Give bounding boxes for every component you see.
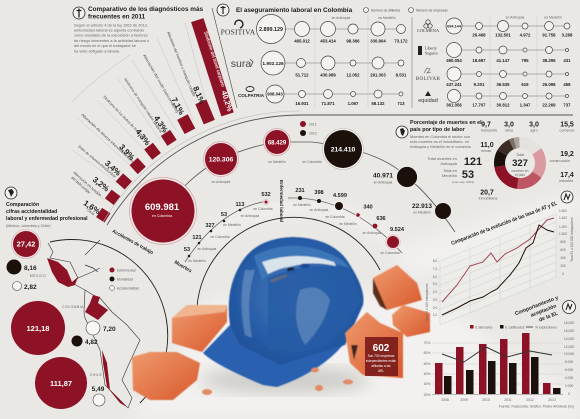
heading: comportamiento: aceptación — [530, 303, 557, 319]
bubble: 120.306 en Antioquia: en Antioquia — [212, 180, 230, 184]
heading: comparación cifras — [5, 187, 88, 228]
insurer row: Colpatria: 1.067 — [348, 101, 359, 106]
icon: trend N — [561, 191, 573, 203]
insurer row: Bolívar: 36.535 — [496, 82, 510, 87]
insurer row: Bolívar: 458 — [563, 82, 571, 87]
insurer row: Colpatria: COLPATRIA — [238, 93, 265, 98]
text block: definición enfermedad laboral: Según el artículo 4 de la ley 1562 de 2012, — [74, 22, 148, 28]
México values — [6, 230, 40, 291]
bubble: 120.306 en Antioquia: 120.306 — [209, 156, 233, 164]
heading: comparación cifras: (México, colombia y Chile) — [6, 224, 51, 228]
line chart: evolución AT y EL: 2,0 — [433, 306, 437, 310]
insurer row: Bolívar — [416, 67, 571, 87]
chart: mortalidad line: 53 — [184, 247, 190, 253]
stats: totals: Total en — [443, 168, 457, 173]
donut labels — [479, 122, 574, 200]
México values: 8,16 — [24, 265, 37, 272]
bubble: 214.410 en Colombia: 214.410 — [331, 146, 355, 154]
insurer row: Equidad: 30.812 — [496, 102, 510, 108]
chart: enfermedad laboral line — [278, 180, 405, 255]
legend: 2012 / 2013: 2013 — [309, 132, 317, 136]
bar chart: comportamiento y aceptación: 70% — [424, 341, 430, 345]
callout: 602: 602 — [373, 343, 390, 354]
bar chart: comportamiento y aceptación: 4.000 — [565, 376, 573, 380]
text block: muertes: más muertes es el inmobiliario. en — [410, 139, 469, 144]
insurer row: Liberty Seguros: 431 — [563, 58, 571, 63]
text block: definición enfermedad laboral: enfermedad laboral es aquella contraída — [74, 28, 144, 32]
heading: diagnósticos — [73, 6, 204, 20]
insurer row: Positiva: 2.899.129 — [259, 27, 283, 33]
insurer row: Liberty Seguros: 18.697 — [472, 58, 486, 63]
stats: totals: Medellín — [442, 173, 457, 178]
bubble: 214.410 en Colombia — [302, 128, 364, 170]
insurer row: Sura: 1.902.126 — [262, 61, 284, 67]
insurer row: Bolívar: 619 — [521, 82, 529, 87]
chart: radial bar chart of diagnoses: Alteración del hombro y manguito rotador — [166, 31, 196, 98]
legend: afiliados y empresas — [364, 8, 448, 12]
insurer row: Sura: 430.089 — [320, 72, 336, 78]
Chile values: 5,49 — [92, 386, 105, 393]
insurer row: Equidad: 361.056 — [446, 102, 462, 108]
line chart: evolución AT y EL: 800 — [560, 240, 566, 244]
chart: enfermedad laboral line: 636 — [376, 216, 386, 222]
insurer row: Liberty Seguros: 41.147 — [496, 58, 510, 63]
chart: mortalidad line: en Antioquia — [241, 214, 259, 218]
bar chart: comportamiento y aceptación — [424, 321, 574, 402]
chart: mortalidad line: 53 — [221, 212, 227, 218]
line chart: evolución AT y EL: Tasa EL x 100.000 trabajadores — [570, 217, 574, 262]
text block: definición enfermedad laboral: de riesgo inherentes a la actividad laboral o — [74, 38, 149, 43]
chart: mortalidad line: 327 — [205, 223, 215, 229]
chart: radial bar chart of diagnoses: 4,3% — [134, 127, 152, 147]
line chart: evolución AT y EL: 1,0 — [433, 313, 437, 317]
donut labels: 15,5 — [560, 122, 574, 128]
stats: totals: Total muertes en — [427, 156, 457, 161]
line chart: evolución AT y EL: 1.000 — [559, 232, 567, 236]
insurer row: Equidad: 1.347 — [520, 102, 531, 108]
heading: diagnósticos: Comparativo de los diagnósticos más — [88, 6, 204, 13]
chart: mortalidad line: 532 — [261, 192, 271, 198]
chart: enfermedad laboral line: 4.599 — [333, 193, 347, 199]
chart: radial bar chart of diagnoses: 1,6% — [82, 199, 102, 216]
insurer row: Bolívar: 9.201 — [474, 82, 485, 87]
México values: 2,82 — [24, 284, 37, 291]
column headers: en Antioquia — [332, 16, 350, 20]
chart: radial bar chart of diagnoses: del dedo pulgar — [70, 176, 92, 195]
bar chart: comportamiento y aceptación: 40% — [424, 372, 430, 376]
bar chart: comportamiento y aceptación: 18.000 — [564, 321, 574, 325]
icon: bricks — [132, 265, 430, 400]
chart: enfermedad laboral line: 231 — [295, 188, 305, 194]
chart: radial bar chart of diagnoses — [70, 18, 235, 222]
line chart: evolución AT y EL: 5,0 — [433, 282, 437, 286]
chart: radial bar chart of diagnoses: 8,1% — [191, 85, 206, 105]
legend: bar chart: IL laborales — [475, 326, 493, 330]
bar chart: comportamiento y aceptación: 2010 — [482, 398, 490, 402]
bar chart: comportamiento y aceptación: 12.000 — [564, 345, 574, 349]
donut labels: 20,7 — [480, 190, 494, 196]
donut labels: inmobiliaria — [479, 196, 498, 200]
Chile values: 111,87 — [50, 379, 72, 388]
illustration: helmet and bricks — [132, 237, 430, 400]
bar chart: comportamiento y aceptación: 2011 — [504, 398, 512, 402]
chart: radial bar chart of diagnoses: 40,2% — [219, 89, 235, 113]
insurer row: Positiva: 98.366 — [346, 38, 360, 44]
map legend: Mortalidad — [117, 278, 133, 282]
chart: radial bar chart of diagnoses: Dolor de columna dorsolumbar — [77, 145, 117, 179]
donut labels: 11,0 — [480, 142, 494, 149]
text block: definición enfermedad laboral: como resultado de la exposición a factores — [74, 32, 148, 38]
line chart: evolución AT y EL: 1.600 — [559, 209, 567, 213]
heading: comparación cifras: laboral y enfermedad profesional — [6, 216, 88, 222]
source line: Fuente: Fasecolda. Gráfico: Pedro Arboleda (hc) — [499, 404, 574, 408]
insurer row: Positiva: 330.904 — [370, 38, 386, 44]
line chart: evolución AT y EL: 8,0 — [433, 259, 437, 263]
chart: radial bar chart of diagnoses: Alteración en tendón — [72, 171, 102, 197]
line chart: evolución AT y EL: 3,0 — [433, 298, 437, 302]
insurer row: Colpatria: 71.871 — [321, 101, 335, 106]
legend: bar chart — [470, 325, 557, 330]
chart: radial bar chart of diagnoses: 4,3% — [152, 114, 169, 134]
stats: totals — [427, 156, 482, 184]
insurer row: Equidad: equidad — [418, 98, 438, 104]
insurer row: Colpatria: 713 — [397, 101, 405, 106]
text block: definición enfermedad laboral — [74, 22, 149, 54]
bar chart: comportamiento y aceptación: 2008 — [441, 398, 449, 402]
column headers — [332, 16, 562, 20]
chart: enfermedad laboral line: en Medellín — [339, 222, 357, 226]
insurer row: Liberty Seguros: 490.054 — [446, 58, 462, 63]
donut labels: 9,7 — [481, 122, 491, 128]
insurer row: Equidad: 737 — [563, 102, 571, 108]
chart: mortalidad line: en Antioquia — [198, 247, 216, 251]
chart: enfermedad laboral line: Enfermedad laboral — [278, 180, 284, 222]
bar chart: comportamiento y aceptación: 14.000 — [564, 337, 574, 341]
insurer row: Colpatria: 58.132 — [371, 101, 385, 106]
bubble: 40.971 en Antioquia: 40.971 — [373, 172, 393, 180]
insurer row: Colmena — [417, 18, 573, 38]
bar chart: comportamiento y aceptación: 6.000 — [565, 368, 573, 372]
insurer row: Colmena: 3.268 — [562, 32, 573, 38]
Colombia values: 4,82 — [85, 339, 98, 346]
donut chart: deaths by labor type: Total — [516, 153, 524, 157]
heading: diagnósticos: frecuentes en 2011 — [88, 14, 146, 20]
chart: radial bar chart of diagnoses: 7,1% — [169, 96, 186, 116]
heading: comparación cifras: cifras accidentalidad — [6, 209, 57, 215]
insurer row: Bolívar: 437.241 — [446, 82, 462, 87]
Chile values — [35, 357, 105, 409]
insurer row: Liberty Seguros: Liberty — [425, 46, 437, 50]
callout: 602: independientes están — [366, 359, 396, 363]
bar chart: comportamiento y aceptación: 8.000 — [565, 360, 573, 364]
chart: mortalidad line — [173, 192, 273, 274]
heading: aseguramiento laboral: El aseguramiento laboral en Colombia — [236, 7, 353, 14]
chart: radial bar chart of diagnoses: Síndrome del túnel carpiano — [202, 31, 226, 88]
callout: 602: ARL — [378, 369, 384, 373]
chart: enfermedad laboral line: 398 — [314, 190, 324, 196]
line chart: evolución AT y EL: 1.200 — [559, 225, 567, 229]
legend: 2012 / 2013: 2012 — [309, 122, 317, 126]
chart: radial bar chart of diagnoses: Alteración de discos intervertebrales — [80, 113, 134, 164]
map legend: Enfermedad — [117, 268, 136, 272]
insurer row: Colpatria: 908.043 — [267, 92, 283, 96]
column headers: en Antioquia — [506, 16, 524, 20]
map: Americas — [47, 240, 140, 408]
chart: mortalidad line: 113 — [235, 202, 245, 208]
donut chart: deaths by labor type: 327 — [512, 158, 528, 169]
donut labels: 3,0 — [504, 122, 514, 128]
donut labels: otros — [505, 128, 513, 132]
callout: 602: Son 700 empresas — [368, 354, 395, 358]
map legend: Accidentalidad — [117, 286, 139, 290]
insurer row: Sura: 12.052 — [346, 72, 360, 78]
icon: trend N — [562, 300, 576, 314]
insurer row: Positiva — [221, 14, 408, 44]
text block: definición enfermedad laboral: del medio en el que el trabajador se — [74, 43, 136, 48]
legend: bar chart: % explosiones — [535, 326, 557, 330]
bubble: 22.913 en Medellín: 22.913 — [412, 203, 432, 210]
line chart: evolución AT y EL: Tasa AT x 100 trabajadores — [425, 283, 429, 322]
donut chart: deaths by labor type: el país — [515, 173, 525, 177]
donut labels: comercio — [560, 128, 574, 132]
insurer row: Sura: 51.712 — [295, 72, 309, 78]
insurer row: Sura — [231, 51, 407, 78]
insurer row: Equidad: 17.707 — [472, 102, 486, 108]
Colombia values: 121,18 — [27, 324, 49, 333]
insurer row: Positiva: 465.012 — [294, 38, 310, 44]
arc label: accidentes de trabajo: Accidentes de trabajo — [111, 229, 154, 256]
chart: enfermedad laboral line: en Colombia — [325, 215, 345, 219]
insurer row: Sura: 291.303 — [370, 72, 386, 78]
bubble: 120.306 en Antioquia — [204, 142, 238, 184]
bubble: 214.410 en Colombia: en Colombia — [302, 160, 322, 164]
main arc divider — [103, 8, 573, 225]
insurer row: Liberty Seguros: 795 — [521, 58, 529, 63]
donut labels: 19,2 — [560, 151, 574, 158]
insurer row: Colmena: COLMENA — [417, 28, 440, 33]
bar chart: comportamiento y aceptación: 20% — [424, 393, 430, 397]
donut labels: construcción — [550, 159, 570, 163]
insurer row: Positiva: 73.172 — [394, 38, 408, 44]
insurer row: Colmena: 132.501 — [495, 32, 511, 38]
bubble: 40.971 en Antioquia: en Antioquia — [374, 180, 392, 184]
stats: totals: (ene-may. 2013) — [452, 180, 474, 184]
line chart: evolución AT y EL: 200 — [560, 264, 566, 268]
insurer row: Equidad — [418, 90, 571, 108]
bubble: 68.429 en Medellín: 68.429 — [268, 140, 287, 146]
chart: radial bar chart of diagnoses: 3,4% — [103, 159, 123, 178]
chart: radial bar chart of diagnoses: 3,2% — [91, 175, 111, 193]
chart: mortalidad line: 121 — [192, 235, 202, 241]
bar chart: comportamiento y aceptación: 2013 — [548, 398, 556, 402]
text block: muertes: Antioquia y Medellín es el comercio — [410, 144, 471, 149]
text block: definición enfermedad laboral: ha visto obligado a laboral. — [74, 48, 120, 54]
bar chart: comportamiento y aceptación: 10.000 — [564, 352, 574, 356]
donut labels: transporte — [481, 128, 497, 132]
column dividers — [315, 15, 537, 108]
line chart: evolución AT y EL — [425, 209, 574, 325]
insurer row: Colmena: 694.144 — [447, 24, 462, 28]
column headers: en Medellín — [544, 16, 562, 20]
column headers: en Medellín — [378, 16, 396, 20]
chart: mortalidad line: Muertes — [173, 260, 193, 274]
chart: radial bar chart of diagnoses: Síndrome de los dedos de la mano — [102, 95, 145, 139]
stats: totals: 53 — [462, 169, 474, 181]
arc around map — [50, 240, 168, 403]
insurer row: Liberty Seguros: 38.295 — [542, 58, 556, 63]
bubble: 68.429 en Medellín: en Medellín — [268, 160, 286, 164]
insurer row: Bolívar: 26.098 — [542, 82, 556, 87]
legend: afiliados y empresas: Número de empresas — [416, 8, 448, 12]
donut labels: agro — [530, 128, 538, 132]
heading: porcentaje de muertes: Porcentaje de muertes en el — [410, 120, 482, 126]
line chart: evolución AT y EL: 400 — [560, 256, 566, 260]
stats: totals: Antioquia — [440, 161, 458, 166]
heading: porcentaje de muertes: país por tipo de labor — [410, 127, 466, 133]
line chart: evolución AT y EL: 6,0 — [433, 275, 437, 279]
insurer row: Colpatria: 16.931 — [295, 101, 309, 106]
line chart: evolución AT y EL: 1.400 — [559, 216, 567, 220]
insurer row: Positiva: 453.414 — [320, 38, 336, 44]
callout: 602 — [365, 337, 398, 376]
bubble: 68.429 en Medellín — [264, 128, 290, 164]
insurer row: Positiva: POSITIVA — [221, 28, 256, 36]
text block: muertes — [410, 134, 471, 149]
map labels: COLOMBIA — [62, 305, 84, 309]
line chart: evolución AT y EL: 7,0 — [433, 267, 437, 271]
arc around helmet — [197, 217, 380, 307]
bar chart: comportamiento y aceptación: 2009 — [460, 398, 468, 402]
bar chart: comportamiento y aceptación: 16.000 — [564, 329, 574, 333]
callout: 602: afiliadas a las — [371, 364, 391, 368]
chart: radial bar chart of diagnoses: Alteración del codo (epicondilitis) — [142, 54, 179, 114]
legend: afiliados y empresas: Número de afiliados — [371, 8, 401, 12]
legend: 2012 / 2013 — [300, 121, 317, 136]
chart: mortalidad line: en Medellín — [223, 223, 241, 227]
chart: radial bar chart of diagnoses: Otras — [86, 208, 95, 216]
insurer row: Colmena: 91.758 — [542, 32, 556, 38]
chart: enfermedad laboral line: en Medellín — [293, 203, 311, 207]
map labels — [30, 273, 102, 377]
bar chart: comportamiento y aceptación: 2012 — [526, 398, 534, 402]
México values: 27,42 — [17, 240, 35, 248]
chart: radial bar chart of diagnoses: 3,9% — [117, 142, 136, 162]
Colombia values: 7,20 — [103, 326, 116, 333]
map labels: CHILE — [90, 373, 102, 377]
icon: helmet — [203, 237, 363, 387]
chart: mortalidad line: en Colombia — [210, 235, 230, 239]
line chart: evolución AT y EL: 600 — [560, 248, 566, 252]
bar chart: comportamiento y aceptación: 0 — [568, 392, 570, 396]
chart: enfermedad laboral line: en Antioquia — [363, 231, 381, 235]
legend: bar chart: IL calificados — [505, 326, 525, 330]
chart: enfermedad laboral line: 340 — [363, 204, 373, 210]
bar chart: comportamiento y aceptación: 50% — [424, 362, 430, 366]
donut labels: minas — [481, 149, 491, 153]
bubble: 609.981 en Colombia: en Colombia — [152, 214, 172, 218]
donut chart: deaths by labor type: muertes en — [512, 169, 529, 173]
bubble: 609.981 en Colombia: 609.981 — [145, 202, 180, 213]
chart: enfermedad laboral line: 9.524 — [390, 227, 405, 233]
chart: radial bar chart of diagnoses: Síndrome de manguito rotador bilateral — [123, 77, 163, 134]
insurer row: Liberty Seguros: Seguros — [425, 50, 438, 56]
chart: enfermedad laboral line: en Colombia — [380, 251, 400, 255]
Colombia values — [11, 301, 116, 355]
heading: comportamiento: Comportamiento y — [514, 295, 559, 317]
line chart: evolución AT y EL: 4,0 — [433, 290, 437, 294]
insurer row: Sura: 8.531 — [396, 72, 407, 78]
chart: mortalidad line: en Medellín — [188, 259, 206, 263]
bubble: 609.981 en Colombia — [130, 178, 196, 244]
text block: muertes: Muertes en Colombia el sector con — [410, 134, 470, 139]
donut labels: 3,0 — [529, 122, 539, 128]
line chart: evolución AT y EL: 0 — [562, 272, 564, 276]
heading: comportamiento: de la EL — [538, 310, 560, 323]
bubble: 22.913 en Medellín: en Medellín — [413, 210, 431, 214]
heading: porcentaje de muertes — [396, 120, 482, 138]
heading: comparación cifras: Comparación — [6, 202, 39, 208]
accident bubbles connector arc — [163, 142, 455, 232]
insurer row: Colpatria — [238, 85, 405, 106]
insurer row: Colmena: 4.972 — [520, 32, 531, 38]
insurer row: Bolívar: BOLIVAR — [416, 76, 440, 82]
bar chart: comportamiento y aceptación: 30% — [424, 382, 430, 386]
heading: aseguramiento laboral — [217, 4, 353, 16]
donut chart: deaths by labor type — [500, 142, 540, 184]
bubble: 40.971 en Antioquia — [373, 166, 418, 188]
heading: comparación evolución: Comparación de la evolución de las tasa de AT y EL — [451, 201, 559, 247]
insurer row: Colmena: 26.468 — [472, 32, 486, 38]
insurer row: Sura: sura — [231, 58, 251, 70]
stats: totals: 121 — [464, 156, 482, 168]
bar chart: comportamiento y aceptación: 60% — [424, 351, 430, 355]
insurer row: Equidad: 22.269 — [542, 102, 556, 108]
insurer row: Liberty Seguros — [418, 42, 571, 63]
map labels: MÉXICO — [30, 273, 46, 278]
bubble: 22.913 en Medellín — [412, 203, 451, 219]
map legend — [110, 268, 139, 290]
donut labels: 17,4 — [560, 172, 574, 179]
bar chart: comportamiento y aceptación: 2.000 — [565, 384, 573, 388]
chart: enfermedad laboral line: en Antioquia — [310, 208, 328, 212]
donut labels: industria — [559, 179, 574, 183]
chart: mortalidad line: en Colombia — [253, 207, 273, 211]
